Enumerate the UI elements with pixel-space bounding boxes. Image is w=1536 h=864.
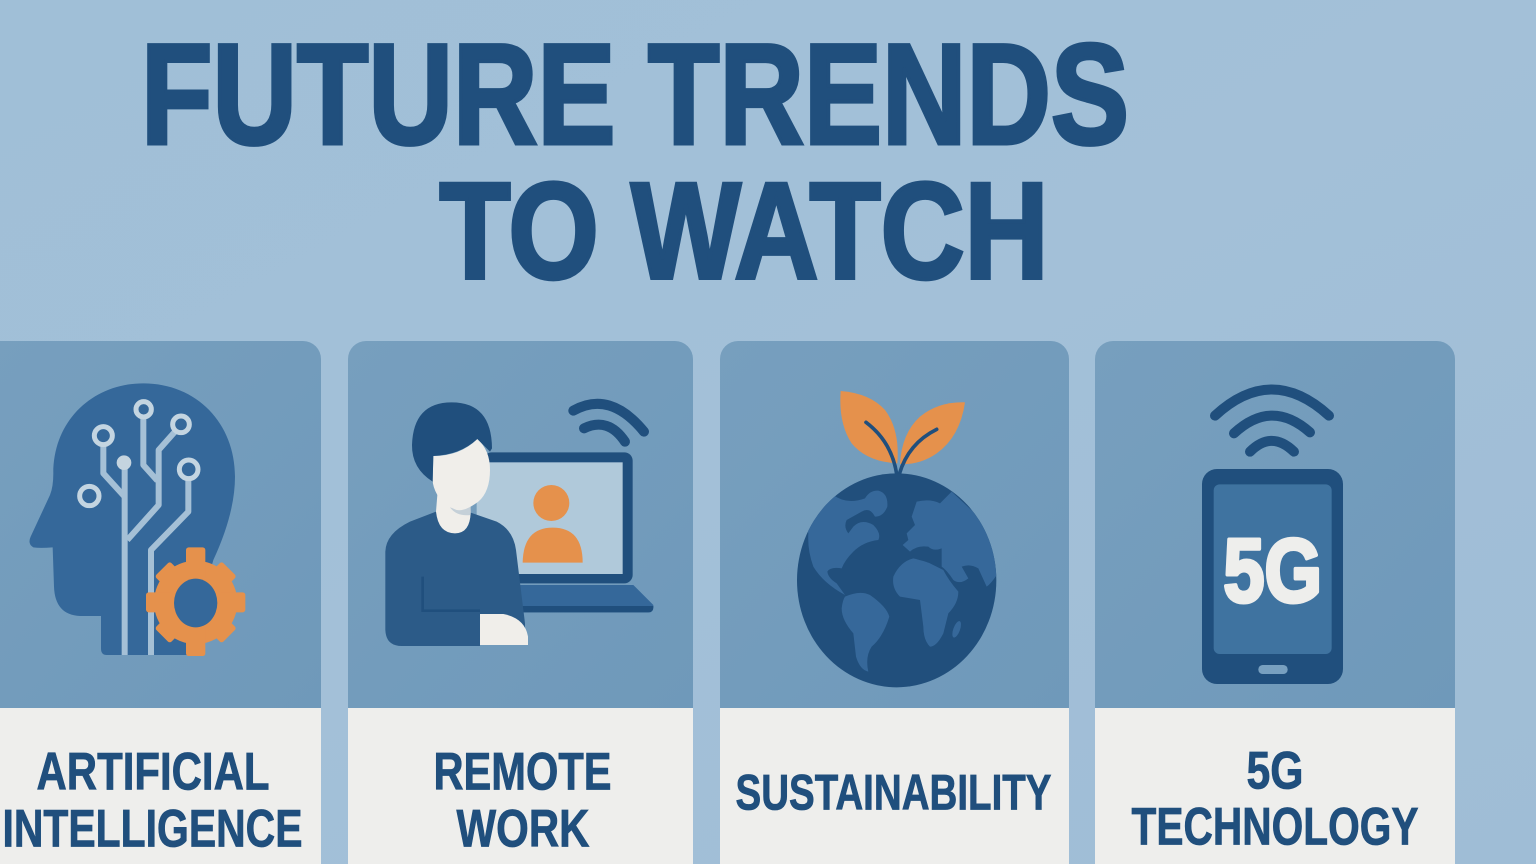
icon: phone body <box>1202 469 1343 684</box>
icon: AI head with circuits and gear <box>29 383 245 656</box>
panel: sustainability <box>720 341 1069 864</box>
icon: phone body: 5G <box>1223 521 1322 621</box>
label: sustainability: SUSTAINABILITY <box>736 764 1052 820</box>
icon: globe <box>797 473 1000 687</box>
icon: globe with sprout <box>797 391 1000 687</box>
title: FUTURE TRENDS <box>141 16 1129 174</box>
panel: 5G technology <box>1095 341 1455 864</box>
icon: person at laptop <box>385 402 653 646</box>
label: artificial intelligence <box>2 742 302 858</box>
icon: signal arcs <box>1215 389 1329 452</box>
label: 5G technology: TECHNOLOGY <box>1132 798 1418 856</box>
icon: wifi signal <box>573 404 644 442</box>
label: remote work <box>434 742 612 858</box>
icon: orange gear <box>146 547 245 656</box>
panel: artificial intelligence <box>0 341 321 864</box>
title: TO WATCH <box>440 155 1048 308</box>
label: artificial intelligence: ARTIFICIAL <box>36 742 270 802</box>
icon: person <box>385 402 528 646</box>
label: artificial intelligence: INTELLIGENCE <box>2 800 302 858</box>
label: 5G technology: 5G <box>1246 742 1304 800</box>
title <box>141 16 1129 308</box>
icon: 5G phone <box>1202 389 1343 684</box>
label: remote work: WORK <box>456 800 590 858</box>
panel: remote work <box>348 341 693 864</box>
label: remote work: REMOTE <box>434 742 612 802</box>
icon: leaves <box>840 391 965 474</box>
icon: laptop <box>477 452 653 612</box>
label: 5G technology <box>1132 742 1418 856</box>
